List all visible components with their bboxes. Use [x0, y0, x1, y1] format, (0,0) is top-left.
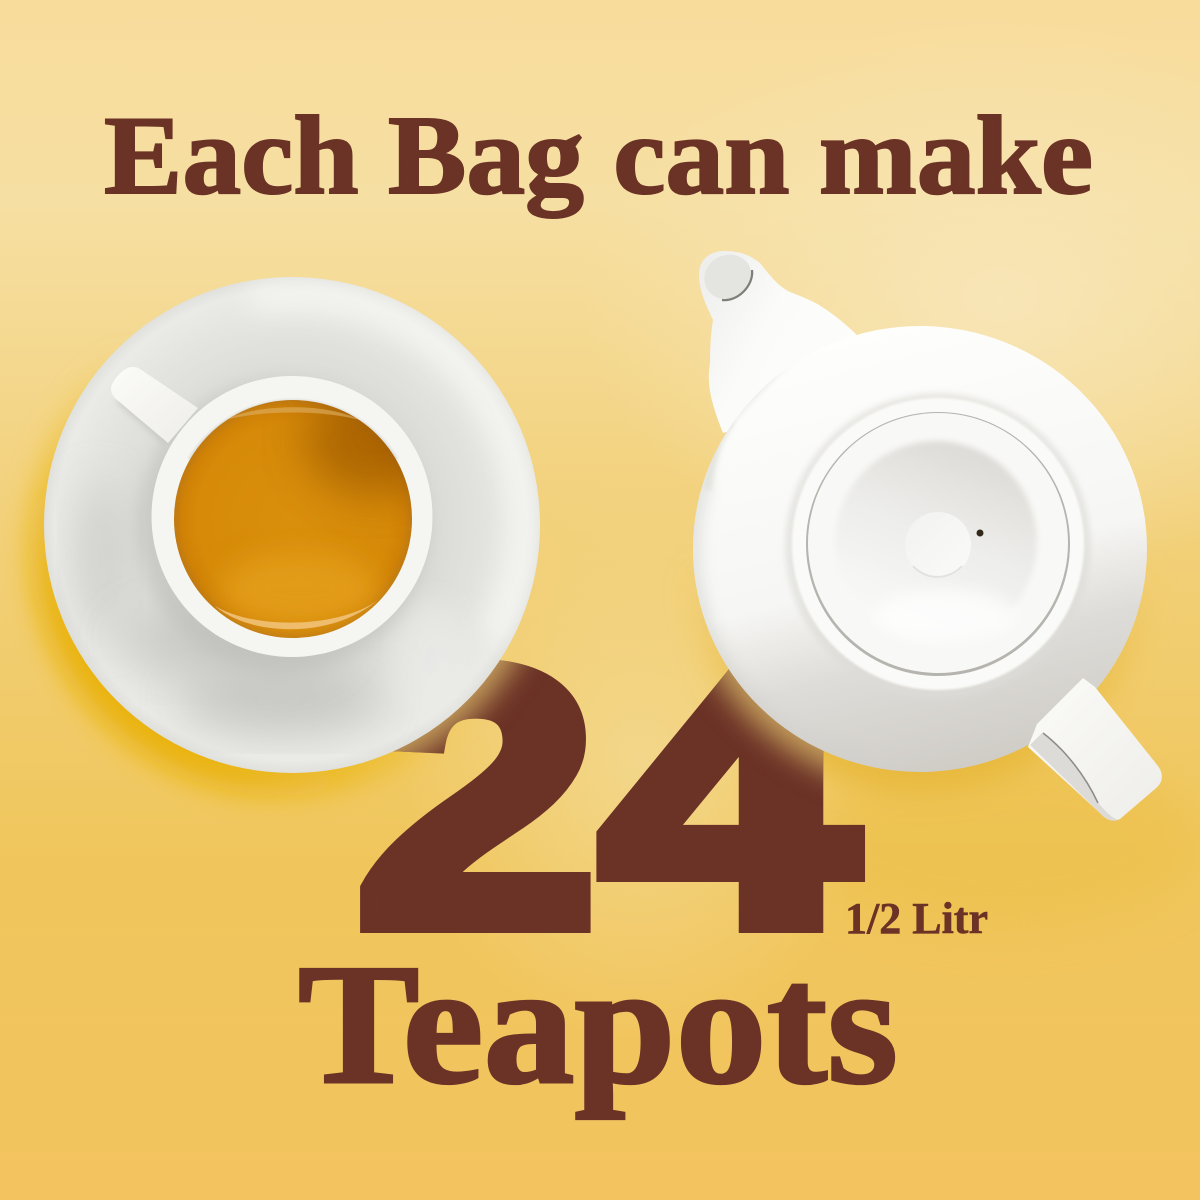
word: Teapots: Teapots	[298, 930, 898, 1120]
knob	[905, 512, 971, 578]
lid recess	[785, 393, 1091, 699]
soft light on number near dishes	[394, 660, 824, 789]
handle	[1028, 678, 1162, 821]
body	[691, 320, 1147, 772]
teapot	[691, 247, 1162, 821]
spout opening	[697, 247, 759, 307]
tea	[174, 400, 412, 638]
title: Each Bag can make	[104, 94, 1093, 218]
cup body	[152, 376, 432, 657]
number 24: 2	[357, 594, 596, 1001]
cup inner wall	[190, 402, 396, 460]
cup and saucer	[44, 277, 540, 773]
lid	[808, 413, 1068, 673]
number 24: 4	[602, 594, 858, 1001]
unit label: 1/2 Litr	[845, 894, 988, 943]
saucer	[44, 277, 540, 773]
spout	[699, 251, 856, 433]
number 24	[357, 594, 858, 1001]
cup handle	[111, 367, 198, 446]
lid hole	[976, 530, 984, 536]
cup shadow	[138, 380, 430, 672]
